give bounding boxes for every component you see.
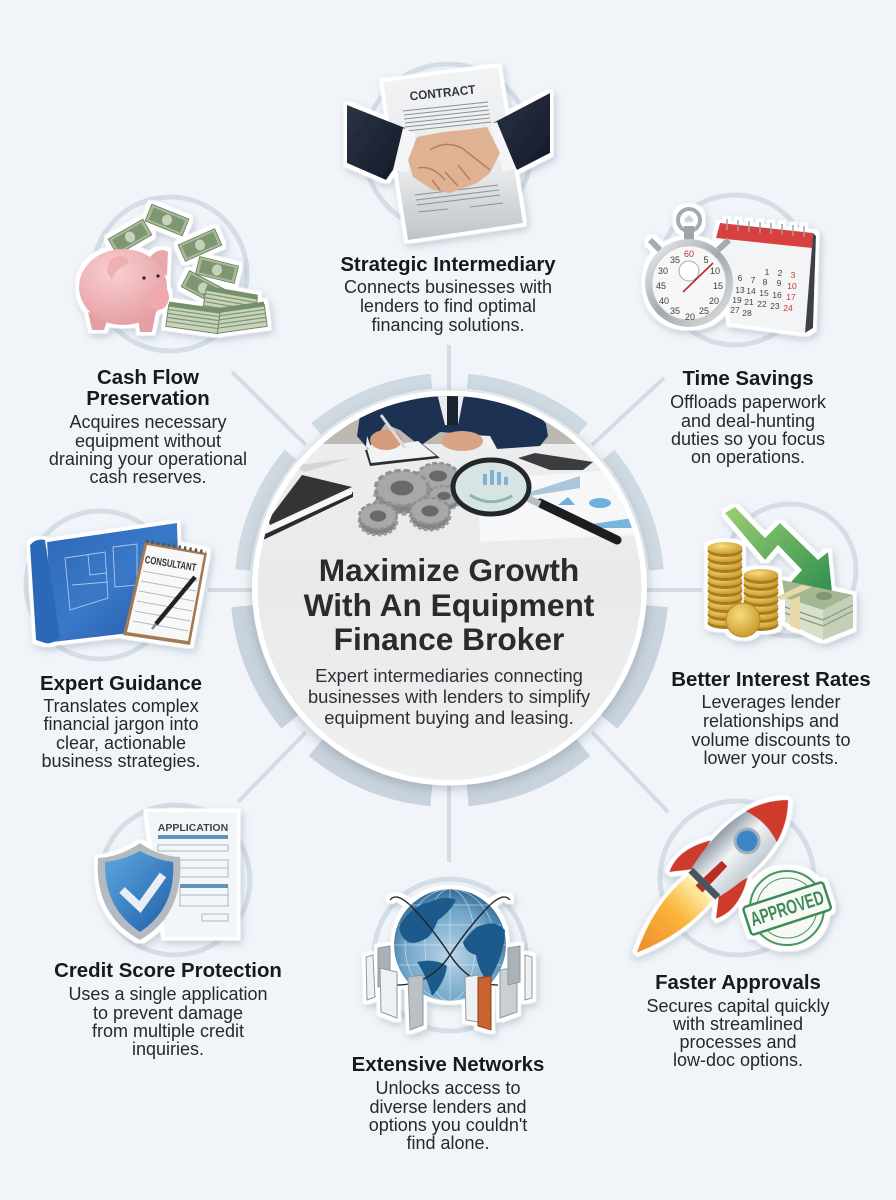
hub subtitle [308, 665, 591, 728]
text: Credit Score Protection [54, 960, 282, 1059]
hub title [304, 552, 595, 657]
magnifier [453, 460, 617, 540]
text: Time Savings [670, 368, 827, 467]
text: Cash Flow Preservation: Acquires necessary [69, 412, 227, 432]
text: Extensive Networks: options you couldn't [369, 1115, 527, 1135]
hands [366, 436, 370, 448]
icon: stopwatch and calendar: 8 [763, 277, 768, 287]
suit [357, 396, 548, 449]
text: Cash Flow Preservation: equipment without [75, 431, 221, 451]
icon: shield and application form: APPLICATION [158, 822, 228, 834]
icon: stopwatch and calendar: 27 [730, 305, 740, 315]
icon: stopwatch and calendar: 5 [703, 255, 709, 265]
text: Better Interest Rates: relationships and [703, 711, 839, 731]
icon: stopwatch and calendar: 35 [670, 255, 680, 265]
icon: contract and handshake: CONTRACT [409, 83, 476, 103]
icon: stopwatch and calendar: 10 [787, 281, 797, 291]
hub subtitle: equipment buying and leasing. [324, 707, 574, 728]
hub subtitle: businesses with lenders to simplify [308, 686, 591, 707]
icon: stopwatch and calendar: 45 [656, 281, 666, 291]
icon: stopwatch and calendar: 3 [791, 270, 796, 280]
calculator [518, 453, 593, 470]
icon: stopwatch and calendar: 10 [710, 266, 720, 276]
icon backing rings [26, 64, 856, 1031]
text: Strategic Intermediary: Strategic Intermediary [340, 254, 556, 276]
icon: globe and doors [366, 889, 532, 1030]
hub title: With An Equipment [304, 587, 595, 623]
text: Faster Approvals: Faster Approvals [655, 972, 821, 994]
hub photo: desk scene [250, 385, 650, 790]
text: Expert Guidance [40, 673, 202, 771]
text: Cash Flow Preservation: Cash Flow [97, 367, 199, 389]
icon: blueprint and consultant notepad: CONSULTANT [144, 554, 198, 574]
icon: shield and application form [98, 812, 237, 940]
text: Extensive Networks: Unlocks access to [375, 1078, 521, 1098]
icon: stopwatch and calendar: 13 [735, 285, 745, 295]
icon: stopwatch and calendar: 16 [772, 290, 782, 300]
icon: gold coins and falling arrow with cash [708, 507, 853, 640]
icon: approved stamp: APPROVED [748, 887, 827, 931]
chart paper [478, 470, 640, 542]
text: Better Interest Rates: volume discounts to [691, 730, 851, 750]
text: Expert Guidance: financial jargon into [43, 714, 199, 734]
text: Expert Guidance: Expert Guidance [40, 673, 202, 695]
icon: stopwatch and calendar: 60 [684, 249, 694, 259]
icon: stopwatch and calendar: 30 [658, 266, 668, 276]
icon: stopwatch and calendar: 17 [786, 292, 796, 302]
icon: stopwatch and calendar: 6 [738, 273, 743, 283]
icon: stopwatch and calendar: 28 [742, 308, 752, 318]
hub subtitle: Expert intermediaries connecting [315, 665, 583, 686]
text: Credit Score Protection: from multiple credit [92, 1021, 244, 1041]
icon: stopwatch and calendar: 23 [770, 301, 780, 311]
text: Faster Approvals: low-doc options. [673, 1050, 803, 1070]
hub title: Finance Broker [334, 621, 564, 657]
text: Better Interest Rates: Better Interest Rates [671, 669, 871, 691]
icon: stopwatch and calendar: 15 [759, 288, 769, 298]
text: Faster Approvals: Secures capital quickly [646, 996, 830, 1016]
hub title: Maximize Growth [319, 552, 579, 588]
text: Credit Score Protection: inquiries. [132, 1039, 204, 1059]
text: Strategic Intermediary: financing solutions. [371, 315, 525, 335]
icon: stopwatch and calendar: 22 [757, 299, 767, 309]
text: Cash Flow Preservation [49, 367, 247, 487]
text: Strategic Intermediary: Connects businesses with [344, 277, 552, 297]
text: Credit Score Protection: Uses a single application [68, 984, 268, 1004]
text: Extensive Networks: Extensive Networks [352, 1054, 544, 1076]
icon: stopwatch and calendar: 40 [659, 296, 669, 306]
text: Time Savings: Time Savings [682, 368, 814, 390]
text: Better Interest Rates: Leverages lender [701, 692, 841, 712]
text: Extensive Networks: diverse lenders and [369, 1097, 527, 1117]
text: Strategic Intermediary: lenders to find optimal [360, 296, 536, 316]
central hub circle [250, 385, 650, 790]
icon: stopwatch and calendar: 20 [709, 296, 719, 306]
icon: stopwatch and calendar: 20 [685, 312, 695, 322]
text: Better Interest Rates [671, 669, 871, 768]
text: Extensive Networks: find alone. [406, 1133, 490, 1153]
hub connector spokes [208, 345, 702, 862]
notebook [263, 492, 353, 540]
icon: rocket [610, 774, 814, 978]
text: Cash Flow Preservation: cash reserves. [89, 467, 207, 487]
icon: stopwatch and calendar: 19 [732, 295, 742, 305]
icon: stopwatch and calendar: 15 [713, 281, 723, 291]
icon: stopwatch and calendar: 24 [783, 303, 793, 313]
icon: stopwatch and calendar: 2 [778, 268, 783, 278]
segmented ring around hub [243, 381, 656, 795]
text: Credit Score Protection: Credit Score Protection [54, 960, 282, 982]
icon: piggy bank and cash [79, 204, 267, 334]
text: Better Interest Rates: lower your costs. [703, 748, 839, 768]
icon: stopwatch and calendar: 14 [746, 286, 756, 296]
text: Cash Flow Preservation: Preservation [86, 388, 210, 410]
icon: blueprint and consultant notepad [30, 523, 207, 645]
text: Time Savings: Offloads paperwork [670, 392, 827, 412]
text: Expert Guidance: clear, actionable [56, 733, 186, 753]
text: Cash Flow Preservation: draining your operational [49, 449, 247, 469]
icon: stopwatch and calendar: 21 [744, 297, 754, 307]
text: Faster Approvals: with streamlined [672, 1014, 803, 1034]
icon: stopwatch and calendar [645, 209, 816, 333]
icon: stopwatch and calendar: 7 [751, 275, 756, 285]
icon: stopwatch and calendar: 1 [765, 267, 770, 277]
text: Time Savings: and deal-hunting [681, 411, 815, 431]
icon: approved stamp [743, 868, 832, 948]
icon: contract and handshake [347, 67, 550, 240]
clipboard [365, 442, 440, 466]
icon: stopwatch and calendar: 25 [699, 306, 709, 316]
icon: stopwatch and calendar: 35 [670, 306, 680, 316]
text: Time Savings: duties so you focus [671, 429, 825, 449]
text: Expert Guidance: Translates complex [43, 696, 199, 716]
text: Extensive Networks [352, 1054, 544, 1153]
text: Faster Approvals: processes and [679, 1032, 797, 1052]
text: Faster Approvals [646, 972, 830, 1070]
text: Strategic Intermediary [340, 254, 556, 335]
text: Expert Guidance: business strategies. [41, 751, 201, 771]
gears [418, 463, 458, 495]
icon: stopwatch and calendar: 9 [777, 278, 782, 288]
text: Time Savings: on operations. [691, 447, 805, 467]
text: Credit Score Protection: to prevent damage [93, 1003, 243, 1023]
